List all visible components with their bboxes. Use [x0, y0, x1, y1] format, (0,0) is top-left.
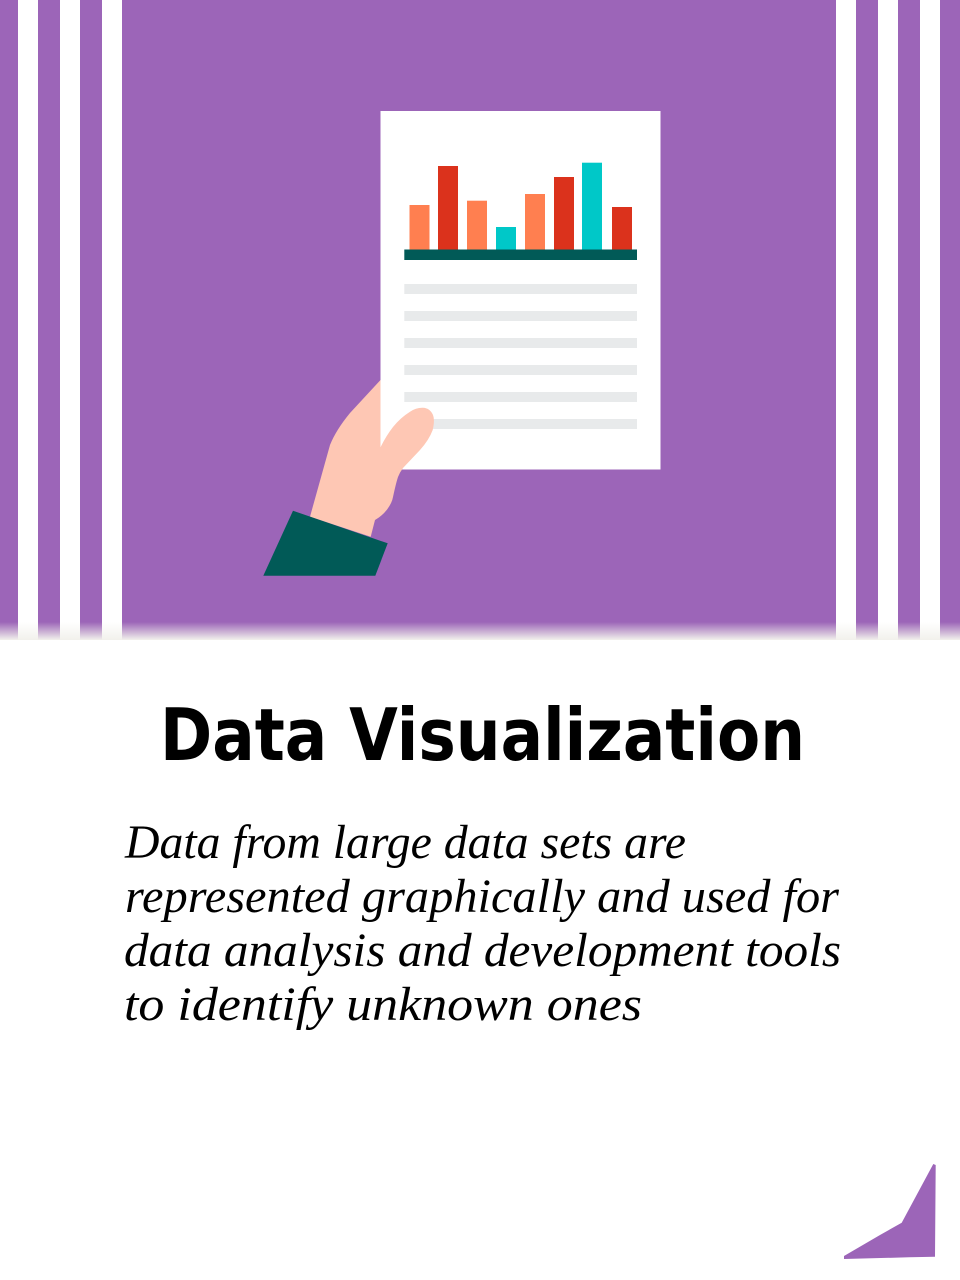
icon: page corner fold — [844, 1164, 936, 1259]
icon: sleeve — [263, 511, 388, 576]
icon: report page — [380, 111, 660, 470]
body text: data analysis and development tools — [124, 924, 841, 977]
body text — [124, 816, 841, 1031]
body text: Data from large data sets are — [124, 816, 686, 869]
illustration: hand holding report — [263, 111, 660, 576]
bar chart — [404, 163, 637, 260]
panel: purple header with stripes — [0, 0, 960, 640]
text lines on report — [404, 284, 637, 429]
body text: to identify unknown ones — [124, 978, 642, 1031]
body text: represented graphically and used for — [125, 870, 839, 923]
icon: hand — [310, 380, 434, 537]
title: Data Visualization — [160, 693, 805, 777]
